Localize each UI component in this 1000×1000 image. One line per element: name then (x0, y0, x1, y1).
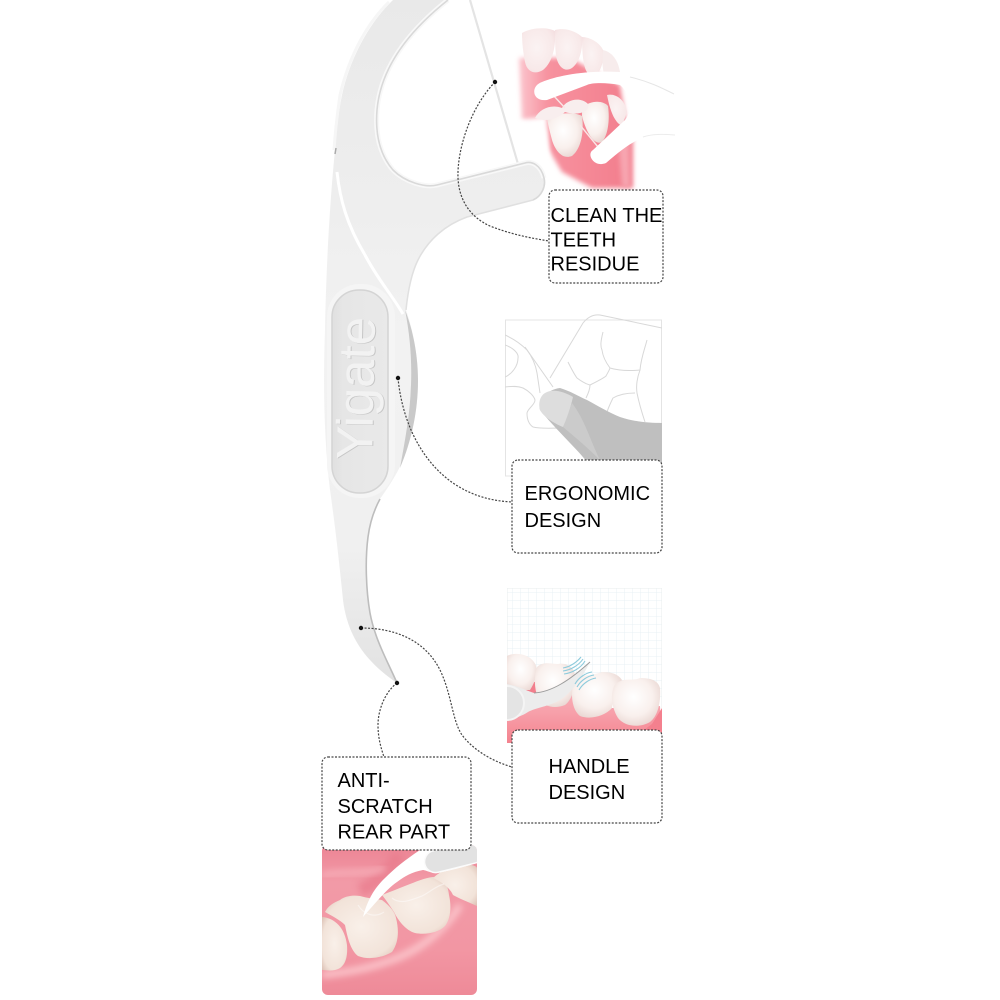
connector: ergonomic (396, 376, 512, 502)
callout: clean the teeth residue: CLEAN THE (550, 205, 662, 227)
outer arc strip (334, 2, 389, 150)
mini pick (534, 72, 636, 164)
gum (507, 695, 660, 743)
callout: ergonomic design: DESIGN (524, 510, 601, 532)
connector: handle (359, 626, 512, 767)
inner edge bevel (377, 0, 545, 200)
gripped pick (540, 388, 662, 465)
connector: clean the teeth (458, 80, 549, 241)
panel: anti-scratch illustration (322, 839, 486, 995)
floss line (470, 0, 518, 164)
lower right edge (366, 499, 397, 683)
callout: anti-scratch rear part: SCRATCH (338, 796, 433, 818)
teeth row (507, 654, 537, 692)
callout: handle design: DESIGN (548, 782, 625, 804)
white ridge (337, 172, 403, 314)
hand outline (505, 315, 662, 428)
inner edge highlight (377, 0, 544, 186)
callout: clean the teeth residue: RESIDUE (550, 254, 639, 276)
tooth fissures (358, 884, 444, 915)
molars (322, 917, 347, 970)
connector: anti-scratch (378, 681, 399, 757)
right bulge crescent (400, 310, 418, 468)
callout: clean the teeth residue (549, 190, 663, 283)
upper teeth (522, 28, 555, 72)
mini pick tip (363, 842, 477, 917)
callout: handle design (512, 730, 662, 823)
callout: anti-scratch rear part (322, 757, 471, 850)
gum (519, 58, 633, 188)
logo text: Yigate (326, 316, 386, 460)
gum-line scallops (535, 100, 588, 120)
callout: anti-scratch rear part: ANTI- (338, 770, 390, 792)
callout: ergonomic design: ERGONOMIC (524, 483, 650, 505)
lower arm edge (406, 200, 533, 310)
callout: handle design: HANDLE (548, 756, 630, 778)
logo text: Yigate (327, 317, 387, 461)
grip halo (327, 284, 395, 498)
lower teeth (547, 113, 583, 157)
panel: clean the teeth illustration (508, 28, 675, 188)
panel: handle design illustration (490, 588, 662, 743)
pick grip disc (507, 716, 519, 721)
pick tip (507, 664, 588, 717)
callout: anti-scratch rear part: REAR PART (338, 822, 450, 844)
motion lines (563, 657, 596, 690)
floss segment (553, 95, 598, 147)
panel: ergonomic illustration (505, 315, 662, 480)
grip logo panel (332, 290, 388, 493)
floss pick (324, 0, 545, 683)
callout: ergonomic design (512, 460, 662, 553)
callout: clean the teeth residue: TEETH (550, 230, 616, 252)
